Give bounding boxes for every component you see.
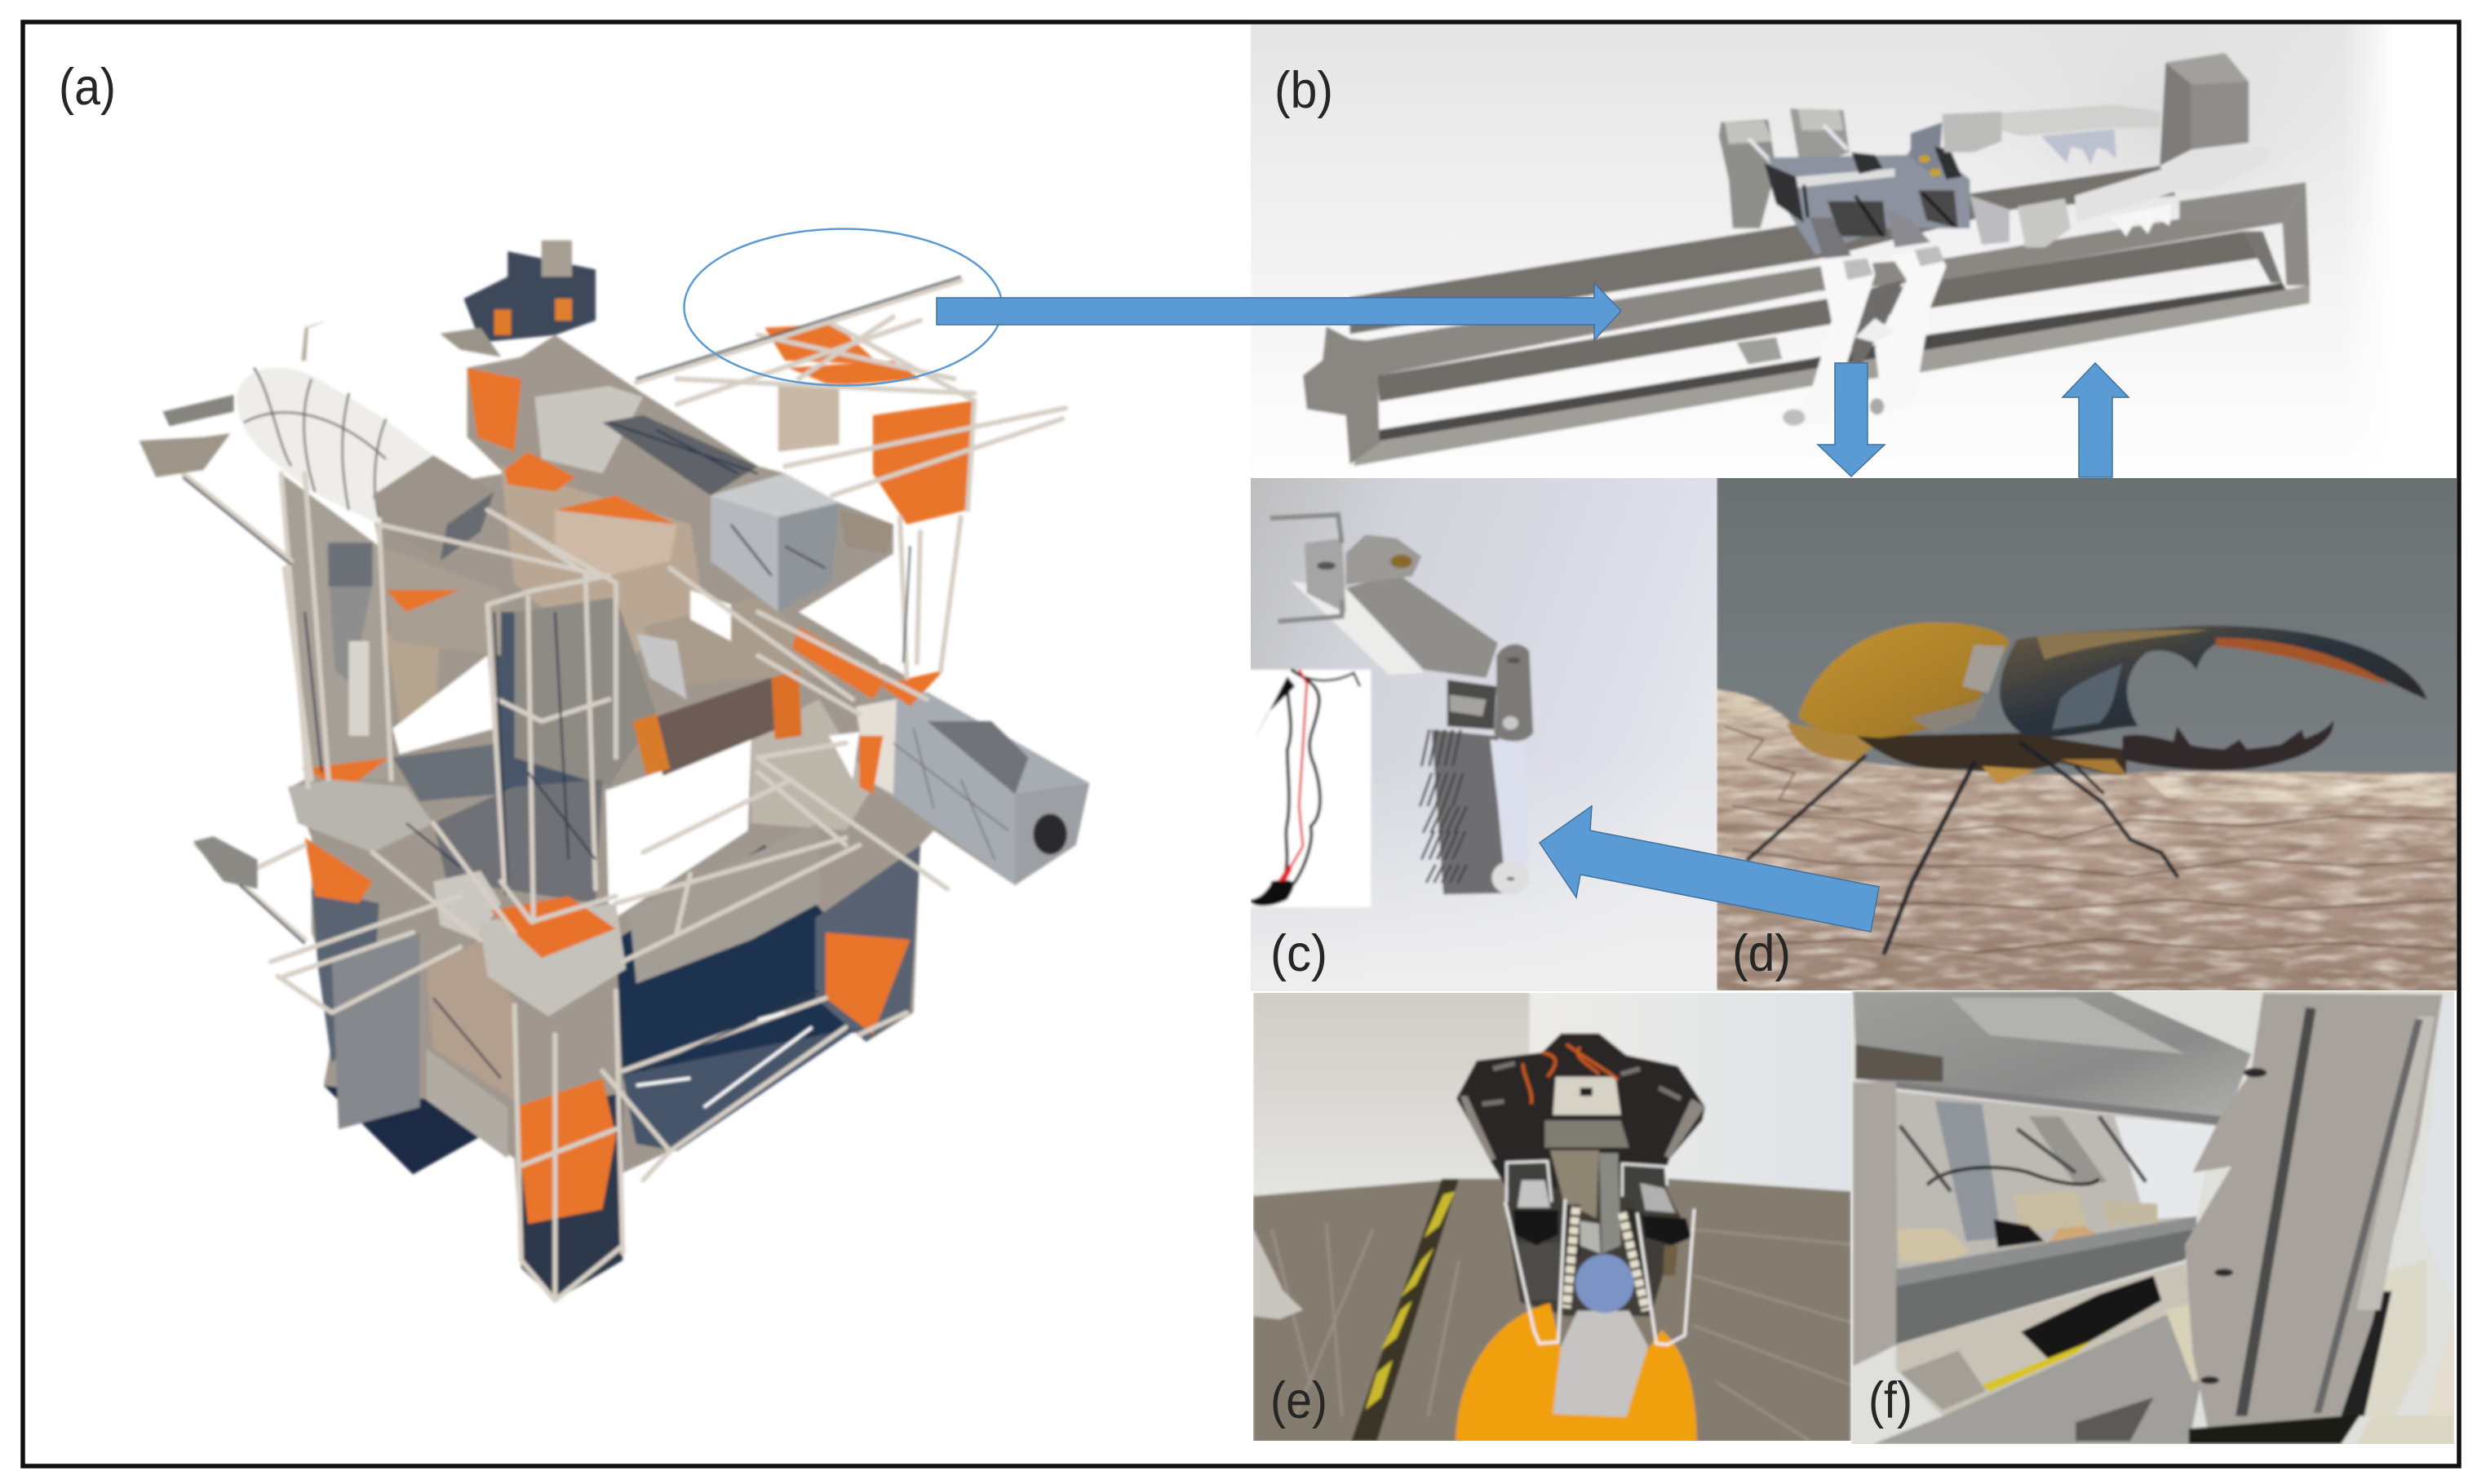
- dark base and leg panels: [291, 568, 920, 1300]
- label (e): (e): [1270, 1372, 1327, 1429]
- panel (b): CAD model of gripper on frame: [1251, 24, 2379, 467]
- panel (e): prototype gripping a ball: [1253, 991, 1857, 1446]
- bark cracks: [1725, 726, 2457, 953]
- panel (c): CAD leg and sketch: [1248, 473, 1725, 995]
- lower dark chassis behind claws: [1507, 1189, 1681, 1316]
- backdrop: [1850, 988, 2460, 1447]
- arrow: panel (d) to panel (c): [1540, 806, 1879, 932]
- lower rail: [1872, 1304, 2209, 1444]
- black base bracket: [2189, 1415, 2360, 1444]
- hazard tape: [1351, 1179, 1459, 1441]
- top rail: [1853, 991, 2251, 1126]
- panel (b) background: [1251, 24, 2379, 463]
- lower arm: [1969, 168, 2174, 250]
- label (c): (c): [1270, 925, 1327, 982]
- pale blocks: [288, 386, 893, 1017]
- aluminium frame rails: [1303, 166, 2310, 466]
- right tube box with hole: [856, 692, 1089, 885]
- backdrop and log: [1717, 473, 2466, 995]
- left arm parts: [139, 321, 329, 888]
- robot body: [1456, 1034, 1705, 1303]
- blue ball: [1575, 1254, 1634, 1313]
- walls: [1253, 991, 1857, 1198]
- arrow: panel (b) down to panel (d): [1818, 363, 1885, 476]
- beetle legs: [1748, 743, 2177, 953]
- label (f): (f): [1868, 1372, 1912, 1429]
- knee and pad body: [1432, 645, 1533, 894]
- upper leg link: [1292, 535, 1498, 678]
- truss lines: [183, 281, 1066, 1300]
- left towers: [1719, 109, 1850, 228]
- main side plate: [2185, 993, 2443, 1432]
- structural masses: [281, 466, 859, 1158]
- panel (c) background: [1248, 473, 1725, 995]
- mounting bracket: [1270, 515, 1346, 622]
- beetle body: [1787, 622, 2426, 785]
- upper arm: [1943, 104, 2160, 165]
- wire frames: [1505, 1199, 1695, 1344]
- middle rail: [1896, 1216, 2196, 1344]
- orange bracket pieces: [301, 324, 974, 1224]
- dark detail lines: [183, 277, 961, 1079]
- overall silhouette: [281, 335, 1089, 1300]
- end block: [2160, 53, 2249, 166]
- lower gap: [1896, 1263, 2192, 1416]
- white drum top-left: [237, 368, 494, 561]
- comb spines: [1420, 729, 1467, 883]
- label (a): (a): [59, 59, 116, 116]
- claw bases and actuators: [1507, 1161, 1691, 1275]
- central gripper assembly: [1719, 53, 2271, 426]
- blue-gray plate: [1764, 122, 1970, 255]
- top sensor unit: [440, 241, 596, 357]
- label (b): (b): [1274, 62, 1333, 119]
- interior behind rails: [1896, 1092, 2216, 1269]
- arrow: panel (d) up to panel (b): [2063, 363, 2129, 477]
- left post: [1853, 1082, 1898, 1367]
- white foam pedestal: [1553, 1311, 1648, 1417]
- wood floor: [1253, 1179, 1850, 1442]
- bark texture: [1717, 685, 2457, 995]
- arrow: panel (a) to panel (b): [937, 283, 1621, 340]
- toothed racks: [1566, 1207, 1646, 1311]
- right background objects: [2341, 998, 2457, 1444]
- white gaps in base: [636, 1012, 812, 1107]
- front fingers: [1737, 210, 1946, 426]
- panel (f): close-up of gripper frame: [1850, 988, 2460, 1447]
- bark cracks and beetle: [1725, 622, 2457, 953]
- central cylinder: [633, 671, 802, 776]
- gray cube: [711, 473, 839, 612]
- white window gaps: [392, 547, 920, 922]
- panel (a): robot concept render: [139, 241, 1089, 1300]
- white inset for beetle leg sketch: [1248, 670, 1371, 907]
- panel (d): Hercules beetle photo: [1717, 473, 2466, 995]
- label (d): (d): [1732, 925, 1791, 982]
- callout ellipse on panel (a): [684, 228, 1002, 385]
- orange turntable: [1456, 1303, 1697, 1446]
